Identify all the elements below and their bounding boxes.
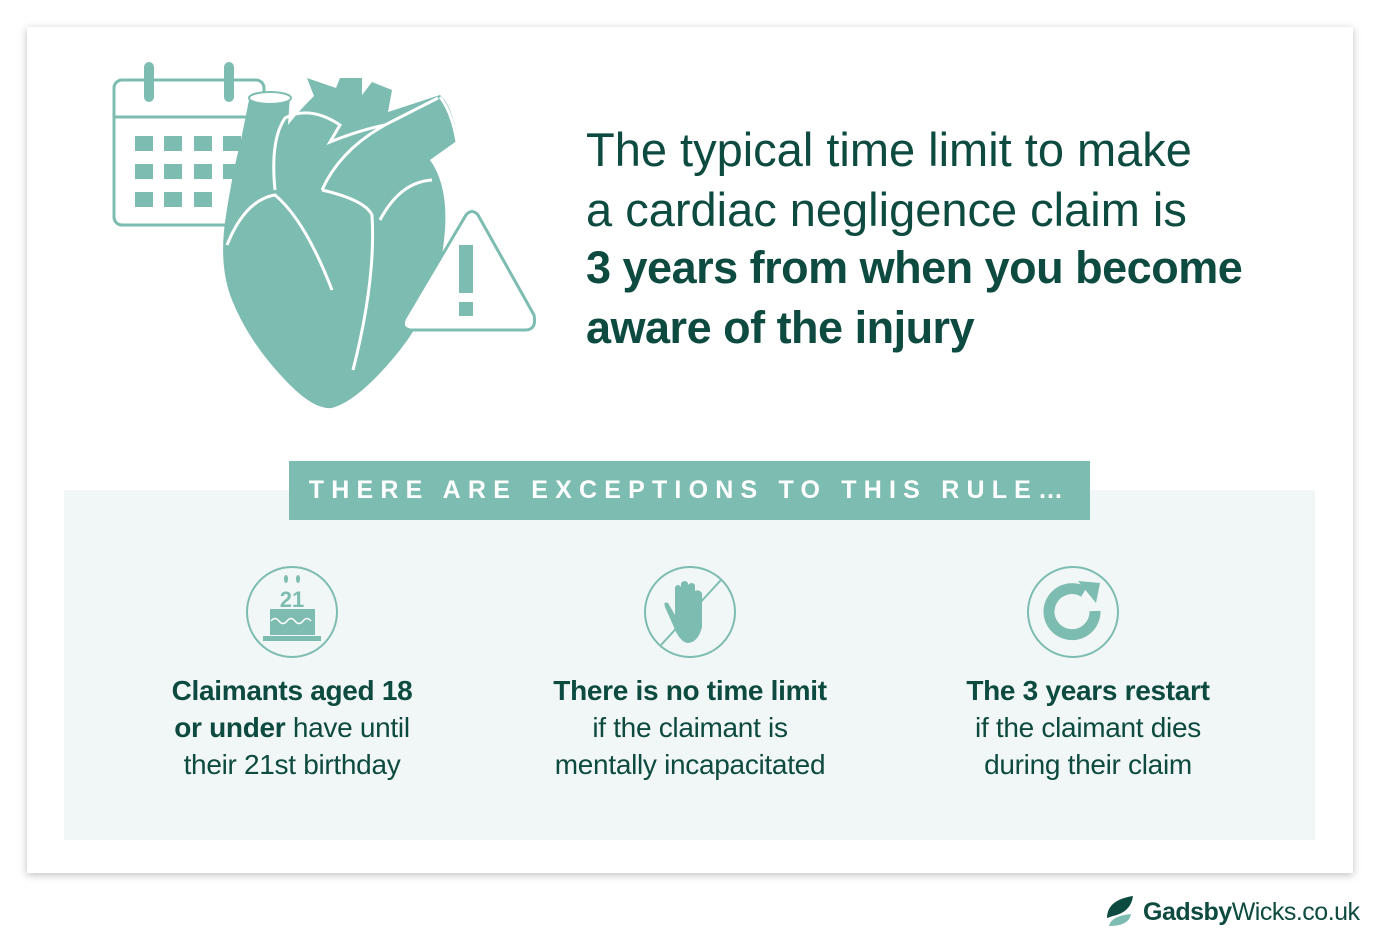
text: The typical time limit to make: [586, 123, 1192, 176]
text: a cardiac negligence claim is: [586, 183, 1187, 236]
text: exception 1: or under have until: [174, 712, 410, 743]
banner: THERE ARE EXCEPTIONS TO THIS RULE…: [309, 476, 1070, 504]
panel: exceptions: [64, 490, 1315, 840]
text: exception 1: [172, 675, 412, 780]
icon: heart: [223, 78, 458, 408]
text: exception 3: if the claimant dies: [975, 712, 1201, 743]
text: exception 3: [966, 675, 1210, 780]
icon: warning triangle: [403, 212, 535, 330]
text: exception 2: mentally incapacitated: [555, 749, 825, 780]
icon: restart arrow: [1027, 566, 1119, 658]
illustration: heart with calendar and warning: [112, 62, 536, 408]
text: exception 1: Claimants aged 18: [172, 675, 412, 706]
icon: hand with no sign: [644, 566, 736, 658]
text: 3 years from when you become: [586, 242, 1242, 293]
icon: birthday cake: [246, 566, 338, 658]
heading: [586, 123, 1242, 353]
text: exception 3: The 3 years restart: [966, 675, 1210, 706]
text: aware of the injury: [586, 302, 974, 353]
banner: [289, 461, 1090, 520]
logo: GadsbyWicks.co.uk: [1143, 898, 1360, 926]
icon: calendar: [114, 62, 264, 225]
text: exception 2: if the claimant is: [592, 712, 788, 743]
text: exception 1: their 21st birthday: [184, 749, 400, 780]
text: exception 2: There is no time limit: [553, 675, 827, 706]
text: exception 2: [553, 675, 827, 780]
icon: birthday cake: 21: [280, 587, 304, 612]
text: exception 3: during their claim: [984, 749, 1192, 780]
